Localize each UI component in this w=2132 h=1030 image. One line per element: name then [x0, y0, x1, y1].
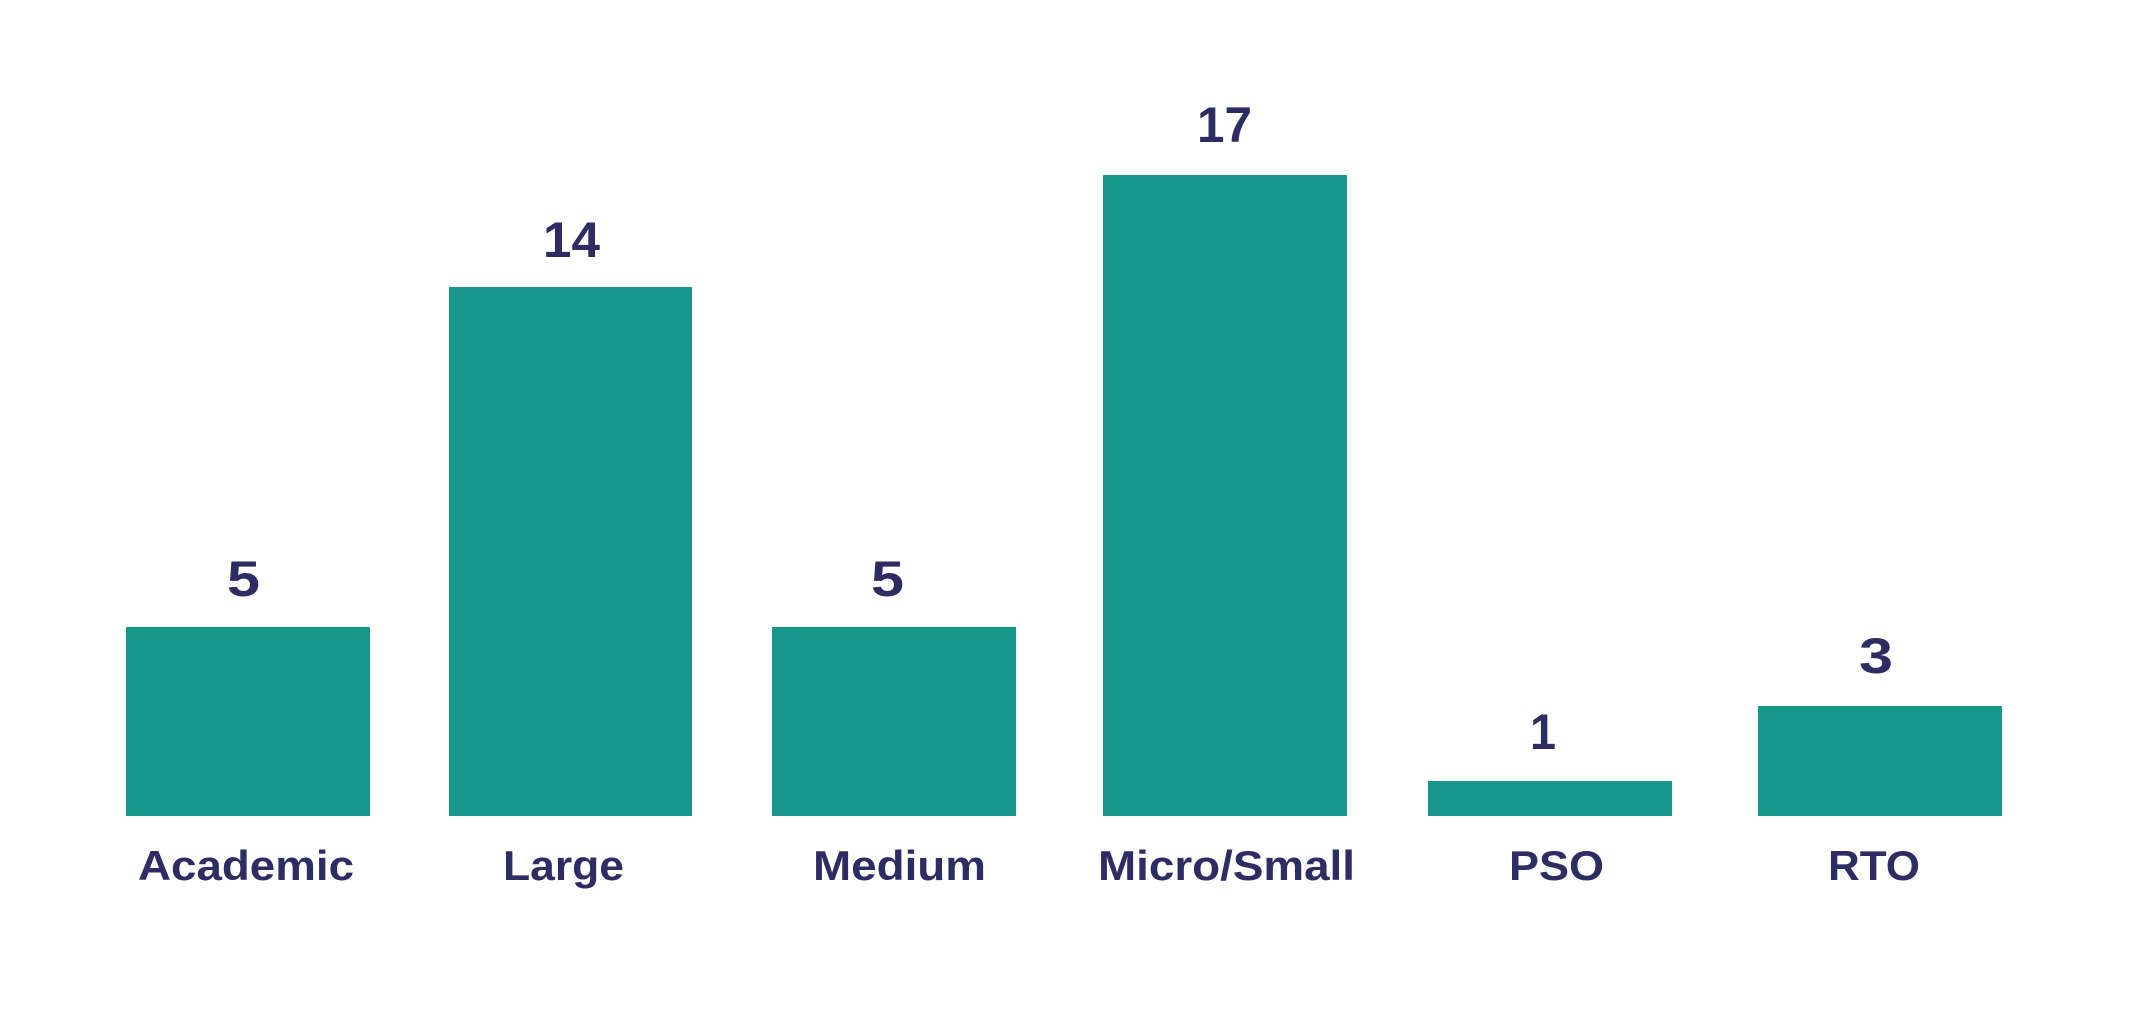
bar group: Medium	[772, 551, 1016, 889]
bar: RTO	[1758, 706, 2002, 816]
value: RTO: 3	[1859, 628, 1893, 684]
bar group: Micro/Small	[1098, 97, 1355, 889]
value: Academic: 5	[227, 551, 260, 607]
bar: Medium	[772, 627, 1016, 816]
label: RTO: RTO	[1828, 842, 1920, 889]
bar: Micro/Small	[1103, 175, 1347, 816]
label: Large: Large	[503, 842, 624, 889]
bar: Academic	[126, 627, 370, 816]
value: Micro/Small: 17	[1197, 97, 1252, 153]
value: PSO: 1	[1530, 704, 1556, 760]
label: Academic: Academic	[138, 842, 354, 889]
label: PSO: PSO	[1509, 842, 1604, 889]
value: Large: 14	[543, 212, 600, 268]
value: Medium: 5	[871, 551, 904, 607]
bar group: Large	[449, 212, 692, 889]
bar: Large	[449, 287, 692, 816]
bar group: PSO	[1428, 704, 1672, 889]
label: Medium: Medium	[813, 842, 986, 889]
bar group: Academic	[126, 551, 370, 889]
bar: PSO	[1428, 781, 1672, 816]
bar group: RTO	[1758, 628, 2002, 889]
label: Micro/Small: Micro/Small	[1098, 842, 1355, 889]
